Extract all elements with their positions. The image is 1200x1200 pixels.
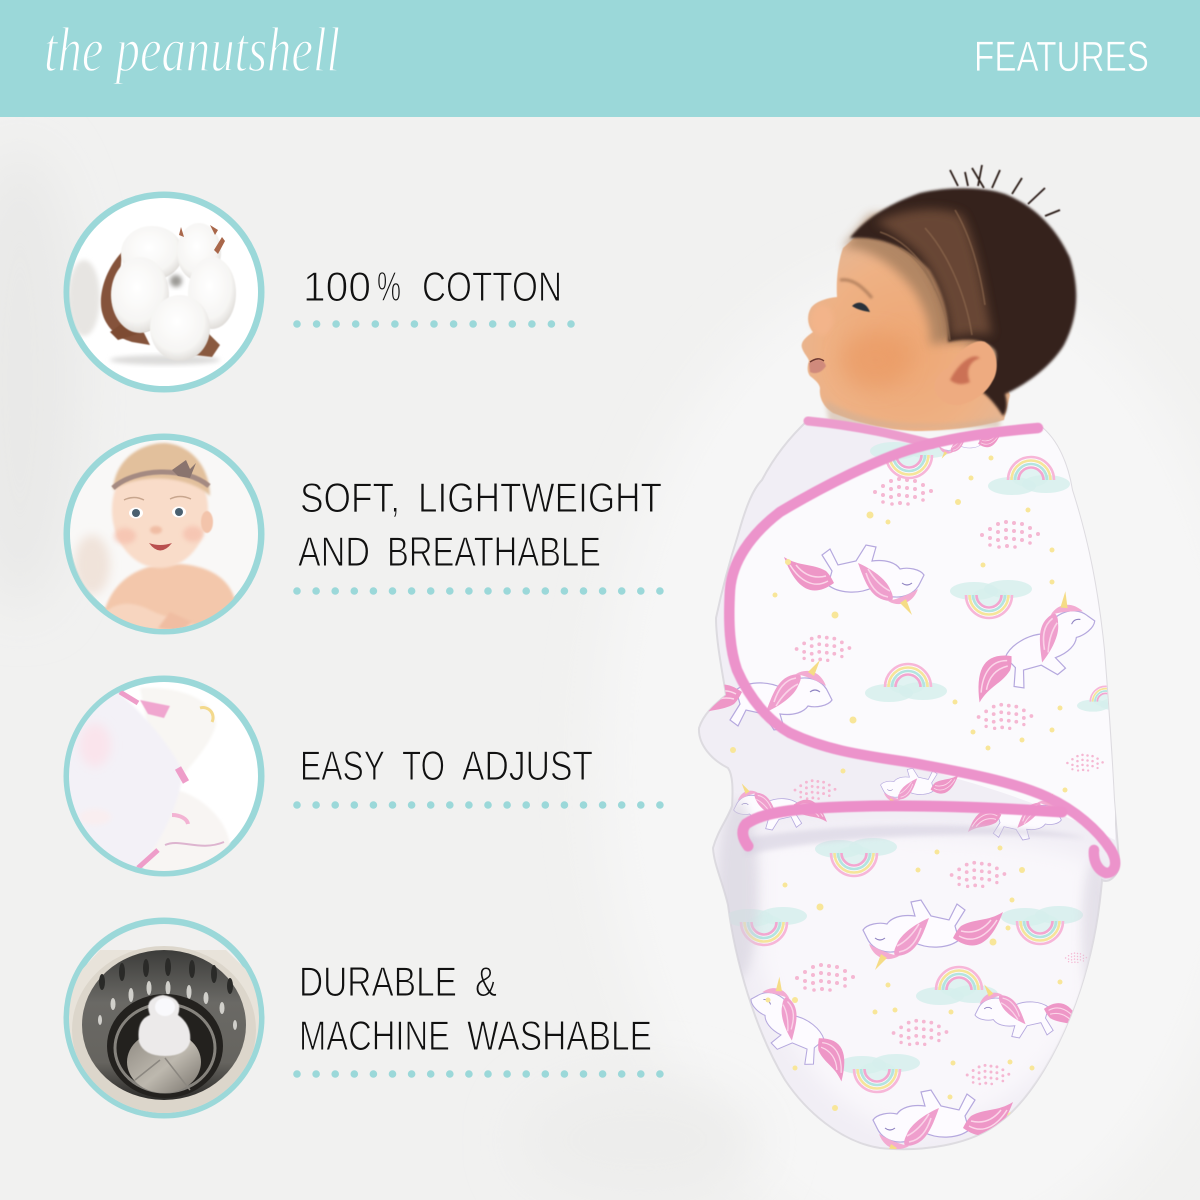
feature 1: label: 100 (303, 263, 371, 310)
ear (934, 341, 997, 405)
feature 3: label: EASY (300, 742, 385, 789)
feature 1: label: COTTON (422, 263, 562, 310)
stray hairs (950, 165, 1060, 216)
feature 2: label: LIGHTWEIGHT (418, 474, 662, 521)
feature 3: adjustable wrap icon (60, 676, 264, 880)
pink piping: lower strap (743, 806, 1062, 846)
feature 4: label (299, 958, 652, 1059)
header band (0, 0, 1200, 117)
eye and brow (852, 303, 870, 312)
baby head (802, 165, 1076, 431)
heading: features: FEATURES (974, 33, 1149, 81)
feature 1: label: % (377, 263, 401, 310)
feature 2: label: SOFT, (300, 474, 400, 521)
hair (850, 188, 1076, 416)
swaddle print: dot clouds (794, 477, 1104, 1085)
swaddle print: rainbows (725, 440, 1132, 1092)
feature 4: dotted divider (293, 1070, 664, 1078)
feature 4: label: DURABLE (299, 958, 457, 1005)
feature 4: label: MACHINE (299, 1012, 450, 1059)
pink piping: wrap flap edge (729, 428, 1115, 873)
feature 4: label: WASHABLE (467, 1012, 652, 1059)
logo wordmark: the peanutshell (44, 14, 340, 85)
nose and mouth (811, 305, 833, 335)
feature 2: dotted divider (293, 587, 664, 595)
feature 3: label: ADJUST (462, 742, 593, 789)
swaddle print: stars (730, 456, 1068, 1118)
feature 1: label (303, 263, 562, 310)
feature 4: label: & (475, 958, 497, 1005)
feature 3: label (300, 742, 593, 789)
wrap flap shading (731, 426, 1115, 840)
feature 4: washing machine icon (64, 918, 264, 1120)
feature 2: label: BREATHABLE (387, 528, 601, 575)
swaddle body (692, 420, 1132, 1160)
feature 1: dotted divider (293, 320, 575, 328)
feature 2: baby icon (64, 434, 264, 636)
pink piping: neckline (808, 421, 932, 444)
feature 3: label: TO (402, 742, 445, 789)
feature 2: label: AND (298, 528, 370, 575)
swaddle print: unicorns (692, 426, 1109, 1160)
feature 2: label (298, 474, 662, 575)
feature 3: dotted divider (293, 801, 664, 809)
feature 1: cotton icon (64, 192, 264, 392)
